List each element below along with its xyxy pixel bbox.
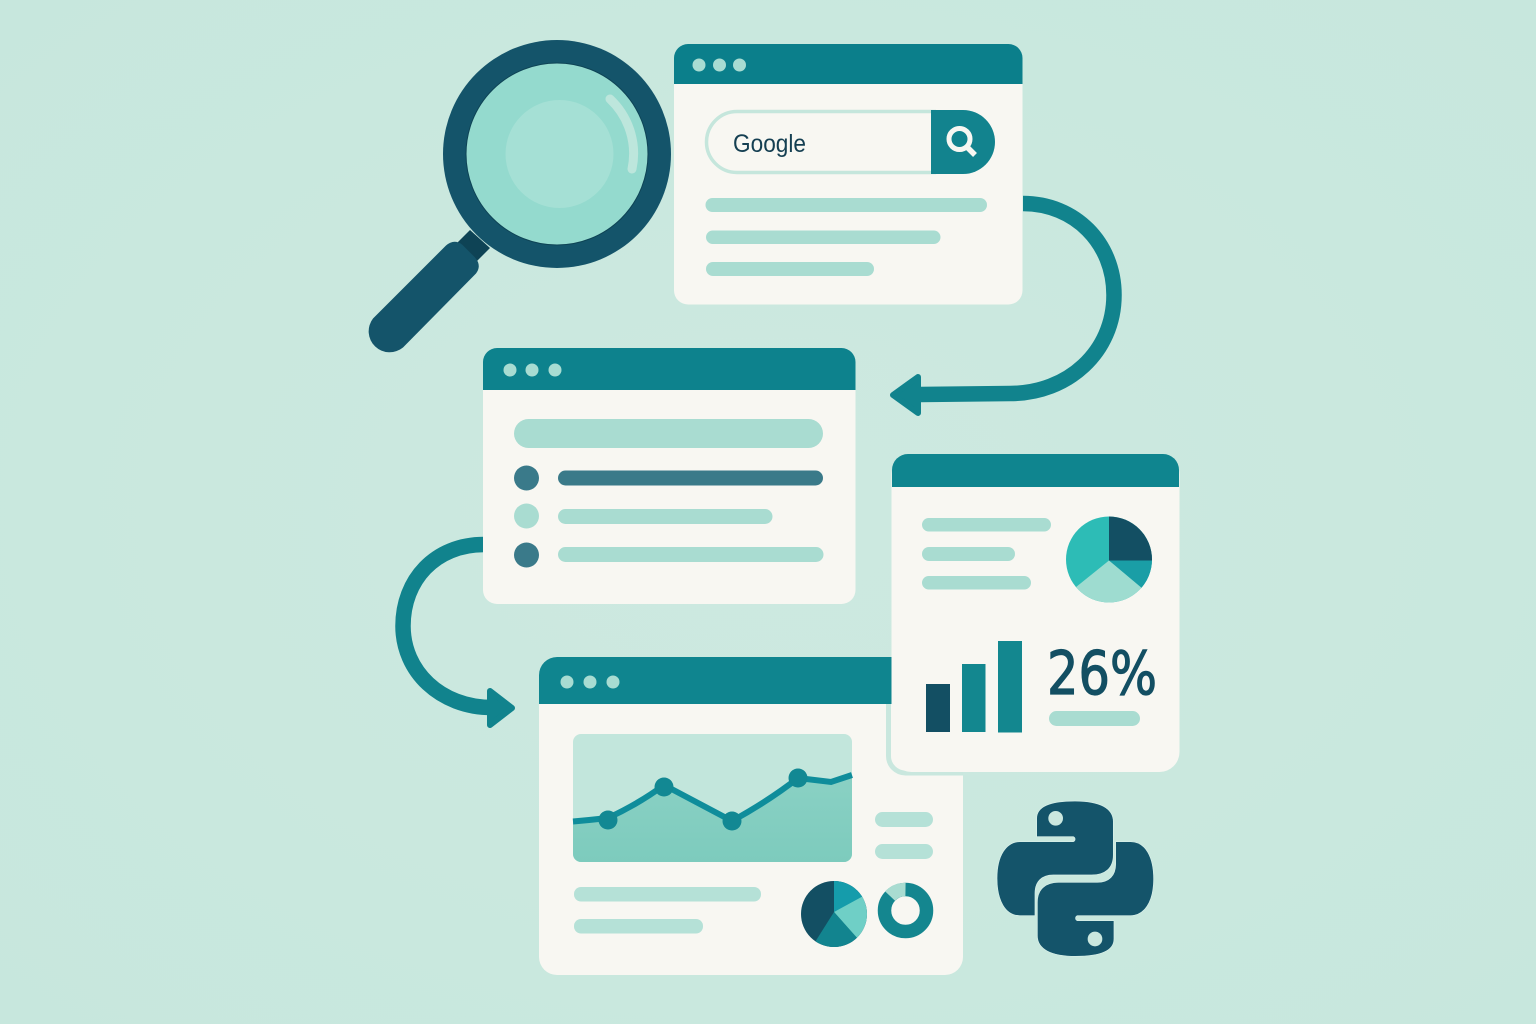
arrow: results window to analytics window — [403, 544, 512, 725]
search result lines — [706, 198, 987, 276]
window control dots — [504, 364, 562, 376]
arrow: search window to results window — [893, 204, 1114, 413]
window control dots — [692, 58, 746, 72]
statistic caption line — [1049, 711, 1140, 726]
window title bar — [483, 348, 856, 390]
window control dots — [560, 676, 620, 688]
panel: results list window — [483, 348, 856, 604]
panel: dashboard window — [892, 454, 1180, 772]
text lines — [922, 518, 1051, 590]
upper snake — [997, 801, 1113, 916]
lower snake — [1037, 842, 1154, 956]
heading placeholder — [514, 419, 823, 448]
side legend lines — [875, 812, 933, 859]
panel outline behind dashboard window — [888, 704, 963, 773]
search text: Google — [733, 130, 806, 158]
icon: magnifying glass — [369, 40, 671, 352]
list bullets — [514, 466, 539, 568]
pie chart — [801, 881, 867, 947]
icon: python logo — [997, 801, 1154, 956]
window title bar — [539, 657, 900, 704]
panel: search window — [674, 44, 1023, 304]
window title bar — [892, 454, 1179, 487]
panel: analytics window — [539, 657, 963, 975]
donut chart — [884, 889, 926, 932]
caption lines — [574, 887, 761, 934]
search bar — [706, 110, 995, 174]
window title bar — [674, 44, 1023, 84]
pie chart — [1066, 516, 1152, 602]
statistic: 26% — [1047, 639, 1157, 709]
bar chart — [926, 641, 1022, 732]
list lines — [558, 470, 824, 562]
icon: search button glass — [949, 128, 975, 155]
area line chart — [573, 734, 852, 862]
